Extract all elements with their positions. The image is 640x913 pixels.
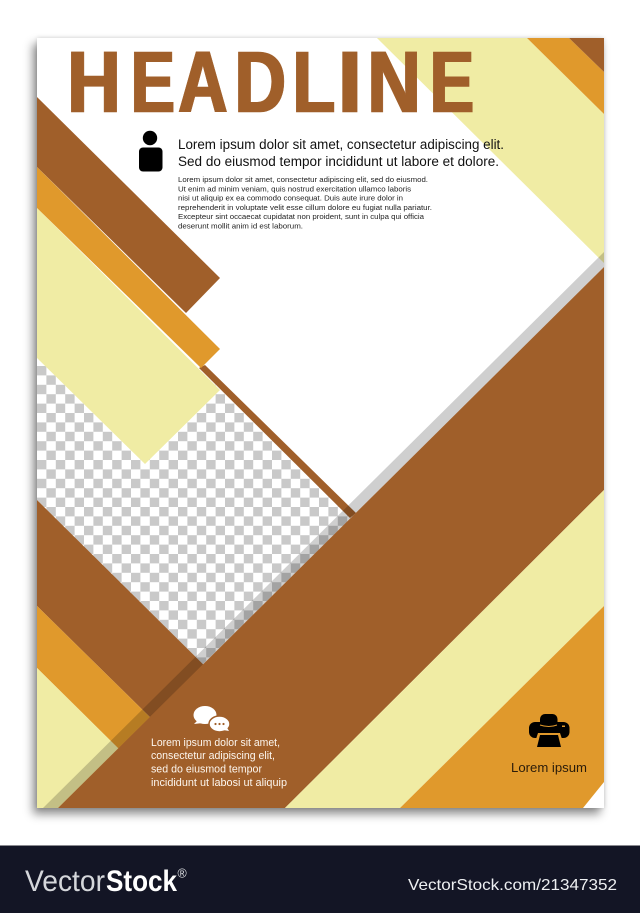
subheading text xyxy=(178,137,504,169)
body paragraph: Lorem ipsum dolor sit amet, consectetur adipiscing elit, sed do eiusmod. xyxy=(178,175,428,184)
upper left brown band xyxy=(37,97,220,313)
headline: E xyxy=(430,34,474,131)
headline: E xyxy=(131,34,175,131)
subheading text: Sed do eiusmod tempor incididunt ut labore et dolore. xyxy=(178,154,499,169)
white caption text xyxy=(151,737,287,789)
printer label: Lorem ipsum xyxy=(511,760,587,775)
subheading text: Lorem ipsum dolor sit amet, consectetur adipiscing elit. xyxy=(178,137,504,152)
top right brown corner xyxy=(569,38,604,72)
translucent shadow strip xyxy=(43,252,604,808)
white caption text: consectetur adipiscing elit, xyxy=(151,750,275,762)
body paragraph: Excepteur sint occaecat cupidatat non proident, sunt in culpa qui officia xyxy=(178,212,425,221)
white caption text: Lorem ipsum dolor sit amet, xyxy=(151,737,280,749)
upper left yellow band xyxy=(37,208,220,464)
body paragraph: Ut enim ad minim veniam, quis nostrud exercitation ullamco laboris xyxy=(178,184,411,193)
icon: person xyxy=(139,131,162,172)
white caption text: sed do eiusmod tempor xyxy=(151,764,262,776)
body paragraph: nisi ut aliquip ex ea commodo consequat. Duis aute irure dolor in xyxy=(178,194,403,203)
lower right yellow band xyxy=(285,490,604,808)
footer logo xyxy=(25,865,177,898)
transparent checker photo placeholder xyxy=(37,358,354,665)
upper left orange band xyxy=(37,167,220,368)
headline: D xyxy=(235,33,286,130)
headline: L xyxy=(293,33,335,131)
flyer page xyxy=(37,38,604,808)
footer bar xyxy=(0,845,640,913)
top right yellow band xyxy=(377,38,604,263)
headline: I xyxy=(338,34,362,131)
body paragraph: reprehenderit in voluptate velit esse cillum dolore eu fugiat nulla pariatur. xyxy=(178,203,432,212)
lower right orange corner xyxy=(400,606,604,808)
page shadow xyxy=(37,38,604,808)
white caption text: incididunt ut labosi ut aliquip xyxy=(151,777,287,789)
lower left orange band xyxy=(37,606,150,748)
body paragraph: deserunt mollit anim id est laborum. xyxy=(178,222,303,230)
footer url: VectorStock.com/21347352 xyxy=(408,877,617,894)
icon: chat bubbles xyxy=(194,706,230,732)
headline: H xyxy=(67,34,121,131)
headline: A xyxy=(178,33,228,131)
headline xyxy=(67,33,474,131)
large brown diagonal band xyxy=(58,267,604,808)
lower left brown band xyxy=(37,500,203,717)
icon: printer xyxy=(529,714,570,747)
footer logo: Vector xyxy=(25,865,105,898)
footer logo: Stock xyxy=(106,865,177,898)
registered mark: ® xyxy=(178,866,188,880)
thin brown diagonal line xyxy=(199,365,356,518)
lower left yellow corner xyxy=(37,668,118,808)
headline: N xyxy=(367,34,421,131)
body paragraph xyxy=(178,175,432,230)
top right orange band xyxy=(527,38,604,114)
